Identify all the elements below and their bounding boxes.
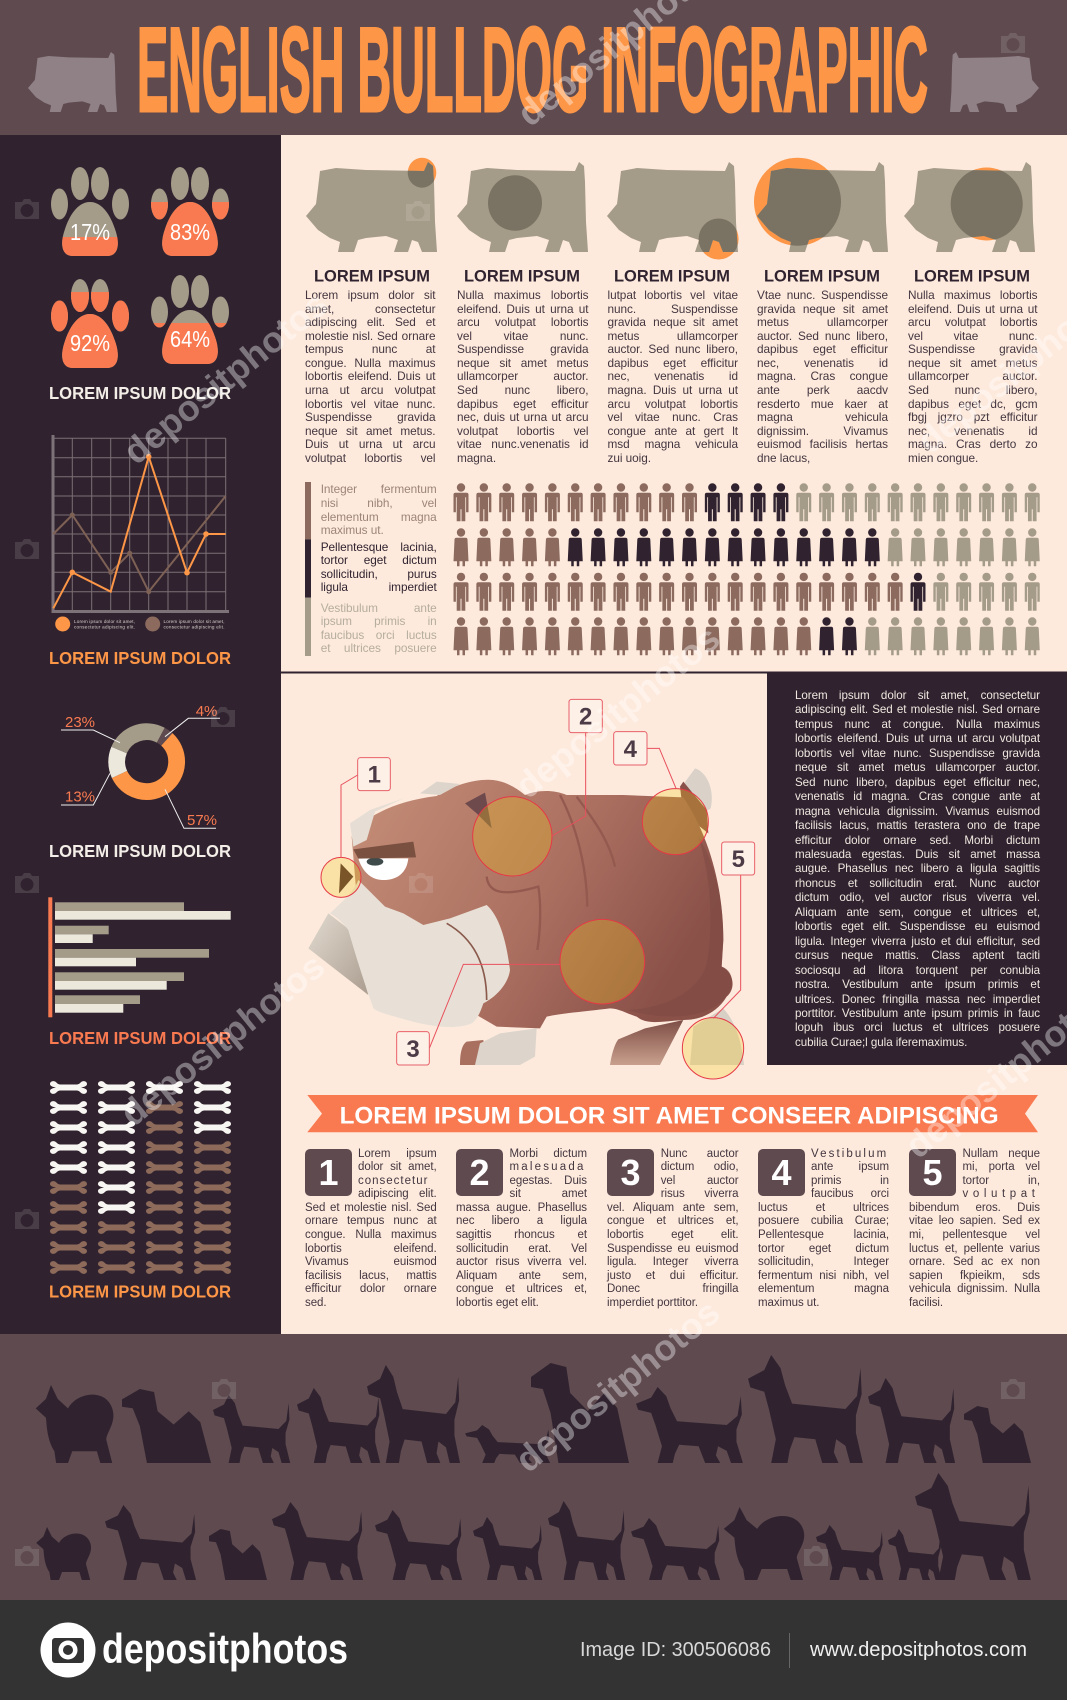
dark panel body text: ultrices. Donec fringilla massa nec imperdiet <box>795 993 1040 1006</box>
watermark overlay: depositphotos <box>507 1291 727 1480</box>
column headings: LOREM IPSUM <box>314 267 430 286</box>
dark panel body text: Sed nunc libero, dapibus eget efficitur nec, <box>795 776 1040 789</box>
dark panel body text: rhoncus et sollicitudin erat. Nunc auctor <box>795 877 1040 890</box>
paw 83% <box>151 167 229 256</box>
column text 4: auctor. Sed nunc libero, <box>757 329 888 343</box>
people legend text 1: nisi nibh, vel <box>321 496 437 510</box>
column text 1: congue. Nulla maximus <box>305 356 436 370</box>
column text 5: Suspendisse gravida <box>908 342 1038 356</box>
watermark overlay: depositphotos <box>112 945 332 1134</box>
donut labels: 57% <box>187 812 217 829</box>
people row 2 <box>454 528 1040 566</box>
silhouette 2: chest highlighted <box>457 162 588 252</box>
bulldog far ear <box>420 782 460 795</box>
column text 2: arcu volutpat lobortis <box>457 315 588 329</box>
bulldog eyebrow <box>353 842 416 859</box>
numbered item 3 <box>606 1148 738 1309</box>
ribbon banner: LOREM IPSUM DOLOR SIT AMET CONSEER ADIPISCING <box>340 1102 999 1129</box>
header band <box>0 0 1067 135</box>
column text 1: lobortis vel vitae nunc. <box>305 396 436 410</box>
numbered item 4: faucibus orci <box>811 1188 889 1200</box>
column text 3: vel vitae nunc. Cras <box>608 410 738 424</box>
numbered item 4: maximus ut. <box>758 1297 819 1309</box>
numbered tiles: 2 <box>469 1152 490 1193</box>
dark panel body text: cubilia Curae;l gula iferemaximus. <box>795 1036 967 1049</box>
donut labels: 13% <box>65 789 95 806</box>
footer logo: depositphotos <box>102 1625 348 1672</box>
people row 4 <box>454 617 1040 655</box>
numbered item 1: lobortis eleifend. <box>305 1243 437 1255</box>
callout numbers: 4 <box>624 736 638 763</box>
numbered item 3: Suspendisse eu euismod <box>607 1243 738 1255</box>
numbered item 1: ornare tempus nunc at <box>305 1215 437 1227</box>
column text 2: vitae nunc.venenatis id <box>457 437 588 451</box>
bulldog part silhouettes row <box>306 158 1035 260</box>
people legend text 3: ipsum primis in <box>321 614 437 628</box>
bulldog forehead tuft <box>350 798 403 847</box>
numbered item 1: consectetur <box>358 1175 428 1187</box>
column text 4: dignissim. Vivamus <box>757 424 888 438</box>
numbered item 1: efficitur dolor ornare <box>305 1283 437 1295</box>
people legend colour bars <box>305 482 311 656</box>
column text 5: dapibus eget dc, gcm <box>908 396 1038 410</box>
bulldog body and head <box>352 780 733 1028</box>
numbered item 3: justo et dui efficitur. <box>607 1270 738 1282</box>
column text 2: dapibus eget efficitur <box>457 396 588 410</box>
numbered item 1: adipiscing elit. <box>358 1188 437 1200</box>
dark panel body text: facilisis lacus, mattis terastera ono de trape <box>795 819 1040 832</box>
column text 3 <box>608 288 738 465</box>
column text 3: dapibus eget efficitur <box>608 356 738 370</box>
column text 2: eleifend. Duis ut urna ut <box>457 302 588 316</box>
column text 1: lobortis eleifend. Duis ut <box>305 369 436 383</box>
ribbon banner <box>307 1095 1038 1132</box>
column text 1 <box>305 288 436 465</box>
main cream panel <box>281 135 1067 1334</box>
numbered item 2: egestas. Duis <box>510 1175 587 1187</box>
column text 3: lutpat lobortis vel vitae <box>608 288 738 302</box>
paw 92% <box>51 279 129 368</box>
dark panel body text: lobortis eget elit. Suspendisse eu euismod <box>795 920 1040 933</box>
column text 3: gravida neque sit amet <box>608 315 738 329</box>
column text 5: arcu volutpat lobortis <box>908 315 1038 329</box>
column text 2: Sed nunc libero, <box>457 383 588 397</box>
numbered item 3: Donec fringilla <box>607 1283 738 1295</box>
column text 2: neque sit amet metus <box>457 356 588 370</box>
callout numbers: 1 <box>368 762 381 789</box>
numbered tiles: 3 <box>620 1152 641 1193</box>
white bones <box>50 1081 231 1214</box>
column text 5: neque sit amet metus <box>908 356 1038 370</box>
callout 1 nose mark <box>339 863 353 893</box>
column text 2 <box>457 288 589 465</box>
column text 3: nunc. Suspendisse <box>608 302 738 316</box>
dark panel body text: Aliquam ante sem, congue et ultrices et, <box>795 906 1040 919</box>
numbered item 3: congue et ultrices et, <box>607 1215 738 1227</box>
people row 1 <box>454 483 1040 521</box>
people legend text 2 <box>320 540 437 594</box>
sidebar heading 1: LOREM IPSUM DOLOR <box>49 383 231 403</box>
bulldog wrinkles <box>487 795 615 950</box>
column text 4: dne lacus, <box>757 451 810 465</box>
dark panel body text: cursus neque mattis. Class aptent taciti <box>795 949 1040 962</box>
column text 1: neque sit amet metus. <box>305 424 436 438</box>
column text 3: auctor. Sed nunc libero, <box>608 342 738 356</box>
numbered item 2 <box>456 1148 587 1309</box>
numbered item 5: mi, porta vel <box>962 1161 1040 1173</box>
people legend text 2: tortor eget dictum <box>321 553 437 567</box>
people legend text 1: elementum magna <box>321 510 437 524</box>
column text 5: Sed nunc libero, <box>908 383 1038 397</box>
sidebar heading 2: LOREM IPSUM DOLOR <box>49 648 231 668</box>
people legend text 3: et ultrices posuere <box>321 641 437 655</box>
numbered item 4: Pellentesque lacinia, <box>758 1229 889 1241</box>
footer website: www.depositphotos.com <box>809 1639 1027 1661</box>
bulldog tail <box>680 768 712 833</box>
callout number boxes <box>358 699 755 1065</box>
bulldog body shading <box>627 837 732 1017</box>
numbered item 4: tortor eget dictum <box>758 1243 889 1255</box>
dark panel body text: efficitur dolor ornare sed. Morbi dictum <box>795 834 1040 847</box>
orange data line <box>53 454 226 608</box>
numbered item 4: elementum magna <box>758 1283 889 1295</box>
bulldog eye <box>358 858 408 880</box>
dark panel body text: porttitor. Vestibulum ante ipsum primis in fauc <box>795 1007 1040 1020</box>
numbered item 5: mi, pellentesque vel <box>909 1229 1040 1241</box>
numbered item 3: vel auctor <box>661 1175 738 1187</box>
column text 2: nec, duis ut urna ut arcu <box>457 410 588 424</box>
donut labels <box>65 703 217 829</box>
people legend text 1 <box>321 482 437 537</box>
column text 3: nec, venenatis id <box>608 369 738 383</box>
dark panel body text: neque sit amet metus ullamcorper auctor. <box>795 761 1040 774</box>
people legend text 2: Pellentesque lacinia, <box>321 540 437 554</box>
column text 5: vel vitae nunc. <box>908 329 1038 343</box>
numbered item 5: Nullam neque <box>962 1148 1040 1160</box>
column text 2: volutpat lobortis vel <box>457 424 588 438</box>
numbered item 1: dolor sit amet, <box>358 1161 437 1173</box>
column text 1: adipiscing elit. Sed et <box>305 315 436 329</box>
sidebar heading 5: LOREM IPSUM DOLOR <box>49 1282 231 1302</box>
column headings: LOREM IPSUM <box>914 267 1030 286</box>
column text 3: msd magna vehicula <box>608 437 738 451</box>
circle callouts <box>321 789 744 1079</box>
dark panel body text: malesuada egestas. Duis sit amet massa <box>795 848 1040 861</box>
bulldog rear legs <box>610 1008 744 1065</box>
left sidebar panel <box>0 135 281 1334</box>
dark panel body text: nostra. Vestibulum ante ipsum primis et <box>795 978 1040 991</box>
numbered item 5: ornare. Sed ac ex non <box>909 1256 1040 1268</box>
numbered item 5: sapien fkpieikm, sds <box>909 1270 1040 1282</box>
numbered item 2: lobortis eget elit. <box>456 1297 539 1309</box>
callout numbers: 3 <box>406 1036 420 1063</box>
column text 5: Nulla maximus lobortis <box>908 288 1038 302</box>
people legend text 3: Vestibulum ante <box>321 601 437 615</box>
column text 4: gravida neque sit amet <box>757 302 888 316</box>
numbered item 5 <box>909 1148 1040 1309</box>
donut segments <box>117 732 177 792</box>
silhouette 3: rear paw highlighted <box>607 162 739 260</box>
numbered item 4: sollicitudin, Integer <box>758 1256 889 1268</box>
column text 4: resderto mue kaer at <box>757 396 888 410</box>
column text 4: dapibus eget efficitur <box>757 342 888 356</box>
footer image id: Image ID: 300506086 <box>580 1639 771 1661</box>
watermark overlay: depositphotos <box>507 617 727 806</box>
numbered item 2: massa augue. Phasellus <box>456 1202 587 1214</box>
numbered item 5: vitae leo sapien. Sed ex <box>909 1215 1040 1227</box>
column text 3: zui uoig. <box>608 451 651 465</box>
column text 1: Suspendisse gravida <box>305 410 436 424</box>
dog silhouettes row 1 <box>36 1355 1031 1463</box>
column text 5 <box>908 288 1038 465</box>
callout numbers: 2 <box>579 704 592 731</box>
numbered item 3: lobortis eget elit. <box>607 1229 738 1241</box>
divider between sections <box>281 672 1067 674</box>
people legend text 1: Integer fermentum <box>321 482 437 496</box>
numbered item 2: sit amet <box>510 1188 587 1200</box>
numbered item 5: facilisi. <box>909 1297 943 1309</box>
dog silhouettes band <box>0 1334 1067 1600</box>
dark panel body text: sociosqu ad litora torquent per conubia <box>795 964 1040 977</box>
column text 4: nec, venenatis id <box>757 356 888 370</box>
people row 3 <box>454 573 1040 611</box>
dark panel body text: ligula. Integer viverra justo et dui efficitur, sed <box>795 935 1040 948</box>
donut labels: 4% <box>196 703 217 720</box>
numbered item 4: fermentum nisi nibh, vel <box>758 1270 889 1282</box>
people legend text 2: sollicitudin, purus <box>321 567 437 581</box>
numbered item 3: dictum odio, <box>661 1161 738 1173</box>
bulldog ear <box>465 793 492 828</box>
people legend text 2: ligula imperdiet <box>321 580 437 594</box>
numbered item 5: bibendum eros. Duis <box>909 1202 1040 1214</box>
dark panel body text <box>795 689 1040 1049</box>
column headings: LOREM IPSUM <box>464 267 580 286</box>
column text 4: ante perk aacdv <box>757 383 888 397</box>
numbered item 4: luctus et ultrices <box>758 1202 889 1214</box>
dark panel body text: augue. Phasellus nec libero a ligula sagittis <box>795 862 1040 875</box>
numbered tiles <box>305 1149 956 1196</box>
chart legend: consectetur adipiscing elit. <box>164 624 224 630</box>
dark panel body text: lopuh ibus orci luctus et ultrices posuere <box>795 1021 1040 1034</box>
brown data line <box>53 496 226 594</box>
column text 5: magna. Cras derto zo <box>908 437 1038 451</box>
silhouette 5: body highlighted <box>904 162 1035 252</box>
column text 4 <box>757 288 888 465</box>
numbered item 2: malesuada <box>510 1161 586 1173</box>
line chart <box>53 435 229 632</box>
sidebar heading 3: LOREM IPSUM DOLOR <box>49 841 231 861</box>
people legend text 3: faucibus orci luctus <box>321 628 437 642</box>
donut leader lines <box>61 718 220 828</box>
donut labels: 23% <box>65 714 95 731</box>
column text 1: volutpat lobortis vel <box>305 451 436 465</box>
dark panel body text: dictum odio, vel auctor risus viverra vel. <box>795 891 1040 904</box>
chart legend <box>55 616 225 632</box>
numbered item 1: Vivamus euismod <box>305 1256 437 1268</box>
paw 64% <box>151 275 229 364</box>
numbered item 2: sollicitudin erat. Vel <box>456 1243 587 1255</box>
footer logo <box>40 1622 348 1678</box>
numbered item 5: tortor in, <box>962 1175 1040 1187</box>
numbered item 5: volutpat <box>962 1188 1040 1200</box>
chart axes <box>53 435 229 612</box>
column text 3: metus ullamcorper <box>608 329 738 343</box>
numbered item 5: luctus et, pellente varius <box>909 1243 1040 1255</box>
column text 4: metus ullamcorper <box>757 315 888 329</box>
people legend text 1: maximus ut. <box>321 523 384 537</box>
column text 4: magna vehicula <box>757 410 888 424</box>
numbered item 1: Sed et molestie nisl. Sed <box>305 1202 437 1214</box>
numbered item 1: Lorem ipsum <box>358 1148 437 1160</box>
sidebar: paw percent stats <box>51 167 229 368</box>
numbered item 4 <box>758 1148 889 1309</box>
column headings: LOREM IPSUM <box>614 267 730 286</box>
numbered item 3: ligula. Integer viverra <box>607 1256 738 1268</box>
numbered item 1: congue. Nulla maximus <box>305 1229 437 1241</box>
watermark overlay: depositphotos <box>115 283 335 472</box>
people legend text 3 <box>320 601 437 655</box>
callout numbers: 5 <box>732 846 745 873</box>
chart legend: Lorem ipsum dolor sit amet, <box>74 619 135 624</box>
people pictogram chart <box>454 483 1040 655</box>
dark panel body text: tempus nunc at congue. Nulla maximus <box>795 718 1040 731</box>
sidebar heading 4: LOREM IPSUM DOLOR <box>49 1028 231 1048</box>
numbered tiles: 5 <box>922 1152 943 1193</box>
paw 64%: 64% <box>170 326 210 352</box>
column text 5: fbgj jgzro pzt efficitur <box>908 410 1038 424</box>
numbered item 4: primis in <box>811 1175 889 1187</box>
dark panel body text: adipiscing elit. Sed et molestie nisl. Sed ornare <box>795 703 1040 716</box>
callout numbers <box>368 704 745 1063</box>
dark panel body text: Lorem ipsum dolor sit amet, consectetur <box>795 689 1040 702</box>
bone pictogram chart <box>50 1081 231 1274</box>
column text 4: Vtae nunc. Suspendisse <box>757 288 888 302</box>
silhouette 4: head highlighted <box>754 158 888 252</box>
footer bar <box>0 1600 1067 1700</box>
dark panel body text: magna vehicula dignissim. Vivamus euismod <box>795 805 1040 818</box>
column text 1: urna ut arcu volutpat <box>305 383 436 397</box>
numbered item 2: congue et ultrices et, <box>456 1283 587 1295</box>
paw 83%: 83% <box>170 219 210 245</box>
chart legend: Lorem ipsum dolor sit amet, <box>164 619 224 624</box>
paw 17%: 17% <box>70 219 110 245</box>
numbered tiles: 4 <box>771 1152 792 1193</box>
silhouette 1: tail highlighted <box>306 158 437 252</box>
column text 4: magna. Cras congue <box>757 369 888 383</box>
numbered item 2: Aliquam ante sem, <box>456 1270 587 1282</box>
column text 5: ullamcorper auctor. <box>908 369 1038 383</box>
column text 2: Suspendisse gravida <box>457 342 588 356</box>
column text 1: Lorem ipsum dolor sit <box>305 288 436 302</box>
chart legend: consectetur adipiscing elit. <box>74 624 135 630</box>
column text 5: nec, venenatis id <box>908 424 1038 438</box>
numbered item 4: Vestibulum <box>811 1148 888 1160</box>
horizontal bar chart <box>48 897 231 1017</box>
numbered item 3: imperdiet porttitor. <box>607 1297 698 1309</box>
column headings <box>314 267 1030 286</box>
paw 92%: 92% <box>70 330 110 356</box>
dark panel body text: venenatis id magna. Cras congue ante at <box>795 790 1040 803</box>
numbered item 2: nec libero a ligula <box>456 1215 587 1227</box>
dark text panel background <box>767 673 1067 1065</box>
numbered item 3: risus viverra <box>661 1188 738 1200</box>
column text 3: arcu volutpat lobortis <box>608 396 738 410</box>
column text 5: mien congue. <box>908 451 978 465</box>
numbered item 2: Morbi dictum <box>510 1148 587 1160</box>
bulldog illustration with callouts <box>308 699 755 1079</box>
brown bones <box>50 1101 231 1274</box>
numbered item 4: posuere cubilia Curae; <box>758 1215 889 1227</box>
column text 3: congue ante at gert lt <box>608 424 738 438</box>
dog silhouettes row 2 <box>36 1473 1031 1580</box>
numbered item 1: facilisis lacus, mattis <box>305 1270 437 1282</box>
numbered item 3: vel. Aliquam ante sem, <box>607 1202 738 1214</box>
numbered item 2: auctor risus viverra vel. <box>456 1256 587 1268</box>
numbered item 1: sed. <box>305 1297 327 1309</box>
callout leader lines <box>341 733 741 1048</box>
paw 17% <box>51 167 129 256</box>
numbered tiles: 1 <box>318 1152 339 1193</box>
numbered item 4: ante ipsum <box>811 1161 889 1173</box>
column text 1: Duis ut urna ut arcu <box>305 437 436 451</box>
column headings: LOREM IPSUM <box>764 267 880 286</box>
bulldog front leg <box>460 1028 537 1065</box>
numbered item 1 <box>305 1148 437 1309</box>
icon: header bulldog left <box>28 52 117 112</box>
column text 2: Nulla maximus lobortis <box>457 288 588 302</box>
numbered item 2: sagittis rhoncus et <box>456 1229 587 1241</box>
numbered item 3: Nunc auctor <box>661 1148 738 1160</box>
column text 5: eleifend. Duis ut urna ut <box>908 302 1038 316</box>
column text 3: magna. Duis ut urna ut <box>608 383 738 397</box>
column text 2: vel vitae nunc. <box>457 329 588 343</box>
column text 2: ullamcorper auctor. <box>457 369 588 383</box>
donut chart <box>61 703 220 829</box>
column text 1: molestie nisl. Sed ornare <box>305 329 436 343</box>
bulldog muzzle and chest <box>308 880 510 1027</box>
column text 1: tempus nunc at <box>305 342 436 356</box>
icon: header bulldog right <box>950 52 1039 112</box>
column text 2: magna. <box>457 451 496 465</box>
column text 4: euismod facilisis hertas <box>757 437 888 451</box>
column text 1: amet, consectetur <box>305 302 436 316</box>
dark panel body text: lobortis eleifend. Duis ut urna ut arcu volutpat <box>795 732 1040 745</box>
numbered item 5: vehicula dignissim. Nulla <box>909 1283 1040 1295</box>
dark panel body text: lobortis vel vitae nunc. Suspendisse gravida <box>795 747 1040 760</box>
